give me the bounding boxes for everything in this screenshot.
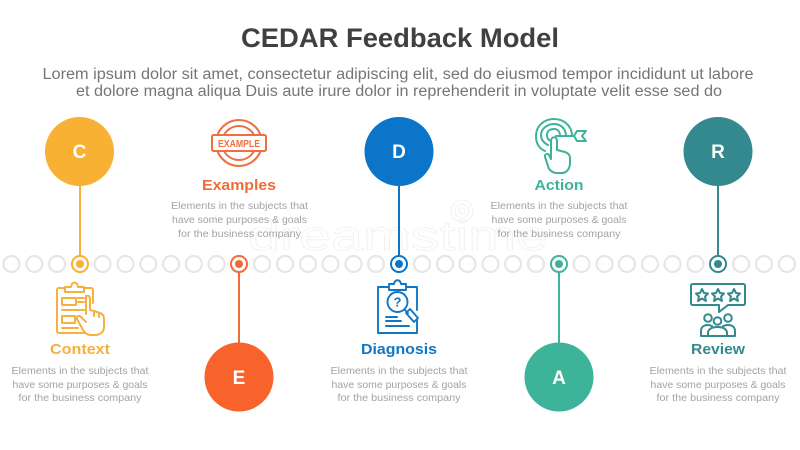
description: Context: have some purposes & goals (12, 379, 148, 391)
description: Examples: have some purposes & goals (172, 214, 307, 226)
description: Action: Elements in the subjects that (490, 200, 628, 212)
title: CEDAR Feedback Model (241, 23, 559, 53)
circle A (524, 342, 594, 412)
circle C: C (73, 142, 87, 163)
heading: Examples: Examples (202, 177, 276, 194)
description: Diagnosis (330, 365, 468, 404)
watermark (248, 200, 548, 259)
subtitle (42, 66, 754, 100)
connector E (231, 256, 247, 348)
icon: clipboard with magnifier: ? (394, 294, 402, 310)
circle D: D (392, 142, 406, 163)
description: Diagnosis: Elements in the subjects that (330, 365, 468, 377)
connector R (710, 180, 726, 272)
description: Review: Elements in the subjects that (650, 365, 787, 377)
circle C (45, 117, 114, 186)
description: Action: have some purposes & goals (492, 214, 626, 226)
watermark: dreamstime (248, 212, 548, 259)
description: Review: have some purposes & goals (650, 379, 786, 391)
circle D (364, 117, 434, 186)
description: Diagnosis: have some purposes & goals (332, 379, 466, 391)
step R: Review (650, 117, 787, 404)
icon: target with hand (536, 119, 586, 173)
connector A (551, 256, 567, 348)
connector C (72, 180, 88, 272)
circle A: A (552, 368, 566, 389)
description: Context: Elements in the subjects that (12, 365, 149, 377)
description: Context (12, 365, 149, 404)
description: Examples (171, 200, 308, 240)
timeline dots (4, 256, 795, 272)
icon: example stamp: EXAMPLE (218, 139, 260, 150)
step E: Examples (171, 120, 308, 412)
icon: clipboard with hand (57, 282, 104, 335)
description: Action: for the business company (498, 228, 621, 240)
icon: star review with people (691, 284, 745, 336)
heading: Diagnosis: Diagnosis (361, 341, 437, 358)
subtitle: Lorem ipsum dolor sit amet, consectetur adipiscing elit, sed do eiusmod tempor incididunt ut labore (42, 66, 754, 83)
description: Examples: for the business company (178, 228, 302, 240)
description: Examples: Elements in the subjects that (171, 200, 308, 212)
subtitle: et dolore magna aliqua Duis aute irure dolor in reprehenderit in voluptate velit esse sed do (76, 83, 722, 100)
step A: Action (490, 119, 628, 412)
description: Review (650, 365, 787, 404)
step D: Diagnosis (330, 117, 468, 404)
heading: Context: Context (50, 341, 110, 358)
heading: Review: Review (691, 341, 745, 358)
circle E: E (233, 368, 245, 389)
circle R: R (711, 142, 725, 163)
description: Review: for the business company (656, 392, 780, 404)
icon: clipboard with magnifier (378, 280, 418, 333)
icon: example stamp (212, 120, 266, 166)
description: Action (490, 200, 628, 240)
step C: Context (12, 117, 149, 404)
description: Diagnosis: for the business company (338, 392, 461, 404)
heading: Action: Action (534, 177, 584, 194)
circle R (684, 117, 752, 186)
description: Context: for the business company (18, 392, 142, 404)
connector D (391, 180, 407, 272)
circle E (204, 342, 274, 412)
